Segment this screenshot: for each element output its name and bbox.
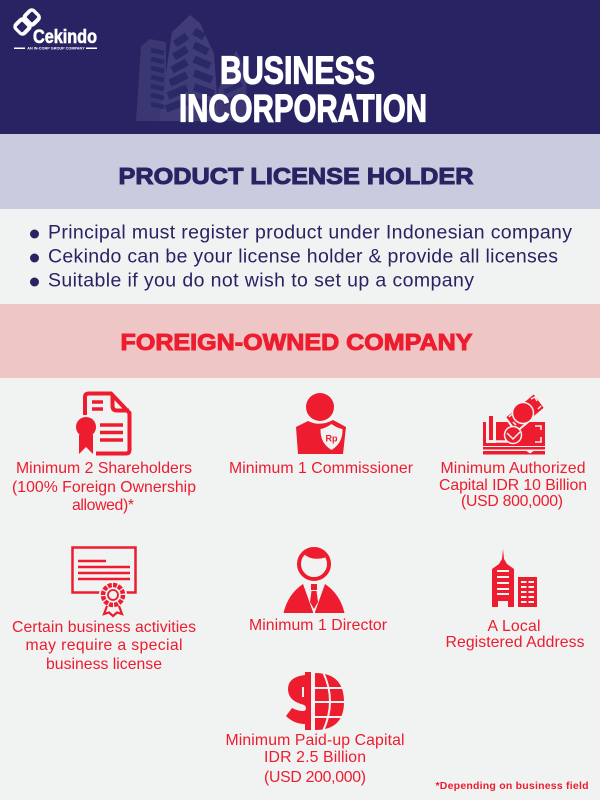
label: (USD 800,000) bbox=[461, 493, 563, 510]
panel: foreign-owned company heading band bbox=[0, 304, 600, 378]
label: (USD 200,000) bbox=[264, 769, 366, 786]
label: Minimum Authorized bbox=[440, 460, 586, 477]
icon: person with Rp shield: Rp bbox=[326, 434, 338, 444]
label: Minimum 2 Shareholders bbox=[16, 460, 192, 477]
label: Registered Address bbox=[446, 634, 585, 651]
icon: city buildings bbox=[492, 549, 537, 607]
panel: product license bullet list bbox=[0, 209, 600, 304]
label: Capital IDR 10 Billion bbox=[439, 477, 587, 494]
item: local registered address bbox=[446, 549, 585, 651]
label: Minimum 1 Director bbox=[249, 617, 387, 634]
title: INCORPORATION bbox=[179, 88, 427, 130]
item: minimum 1 commissioner bbox=[229, 393, 413, 477]
illustration: office buildings bbox=[136, 15, 247, 121]
logo wordmark: Cekindo bbox=[33, 27, 97, 48]
icon: banknotes and hand bbox=[483, 393, 545, 454]
item: minimum paid-up capital bbox=[226, 672, 404, 786]
logo tagline: AN IN-CORP GROUP COMPANY bbox=[27, 46, 85, 50]
label: Certain business activities bbox=[12, 619, 196, 636]
heading: PRODUCT LICENSE HOLDER bbox=[118, 163, 474, 189]
bullet text: Cekindo can be your license holder & provide all licenses bbox=[48, 246, 558, 268]
label: Minimum 1 Commissioner bbox=[229, 460, 413, 477]
icon: certificate with rosette bbox=[72, 548, 136, 616]
label: business license bbox=[46, 656, 162, 673]
item: minimum 2 shareholders bbox=[12, 394, 196, 514]
icon: person with Rp shield bbox=[296, 393, 346, 454]
bullet text: Suitable if you do not wish to set up a company bbox=[48, 270, 474, 292]
label: may require a special bbox=[26, 637, 182, 654]
item: special business license bbox=[12, 548, 196, 673]
bullet text: Principal must register product under Indonesian company bbox=[48, 222, 572, 244]
icon: document with seal bbox=[76, 394, 130, 454]
icon: businessman bbox=[284, 548, 344, 613]
logo: Cekindo bbox=[11, 6, 97, 51]
heading: FOREIGN-OWNED COMPANY bbox=[120, 329, 473, 355]
item: minimum authorized capital bbox=[439, 393, 587, 510]
icon: dollar globe bbox=[286, 672, 345, 731]
label: IDR 2.5 Billion bbox=[264, 749, 366, 766]
label: Minimum Paid-up Capital bbox=[226, 732, 404, 749]
panel: header bbox=[0, 0, 600, 134]
label: A Local bbox=[488, 618, 540, 635]
title bbox=[179, 50, 427, 130]
item: minimum 1 director bbox=[249, 548, 387, 634]
title: BUSINESS bbox=[220, 50, 375, 92]
footnote: *Depending on business field bbox=[436, 780, 588, 792]
panel: product license holder heading band bbox=[0, 134, 600, 209]
icon: chain links bbox=[11, 6, 43, 38]
label: (100% Foreign Ownership bbox=[12, 479, 196, 496]
label: allowed)* bbox=[72, 497, 134, 514]
